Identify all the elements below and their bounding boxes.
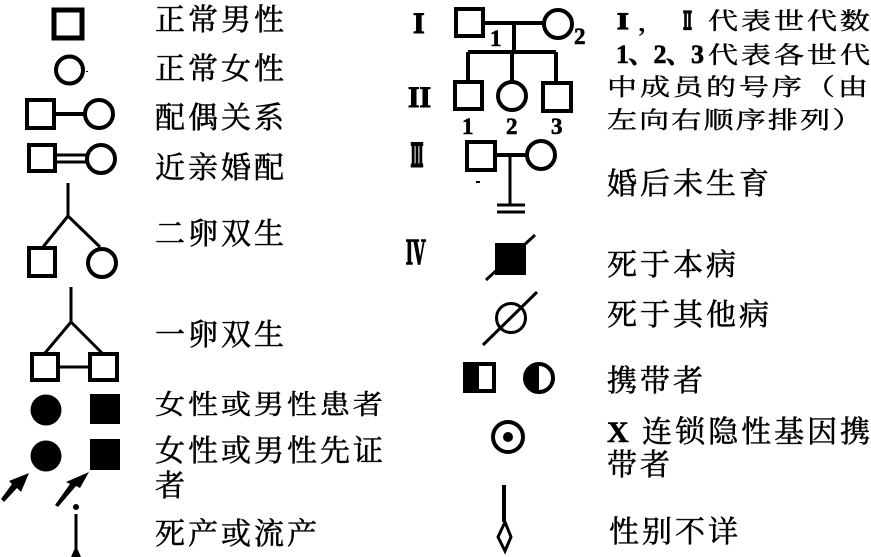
childless marriage symbol xyxy=(467,141,555,212)
label: normal female: 正常女性 xyxy=(155,53,287,86)
label: died of this disease: 死于本病 xyxy=(607,249,739,282)
pedigree example xyxy=(455,9,586,139)
label: stillbirth or miscarriage: 死产或流产 xyxy=(155,518,320,551)
pedigree description: I xyxy=(617,8,629,34)
sex unknown symbol xyxy=(498,485,511,551)
died of other disease symbol xyxy=(483,292,537,345)
label: carrier: 携带者 xyxy=(607,365,706,398)
label: childless after marriage: 婚后未生育 xyxy=(607,168,772,201)
proband symbols xyxy=(1,439,120,507)
label: proband line 2: 者 xyxy=(155,470,188,503)
label: consanguineous marriage: 近亲婚配 xyxy=(155,152,287,185)
normal male symbol xyxy=(54,10,82,38)
label: died of other disease: 死于其他病 xyxy=(607,299,772,332)
pedigree description: 1、2、3 xyxy=(616,40,704,69)
label: X-linked carrier: X 连锁隐性基因携 xyxy=(607,416,871,449)
generation I label: I xyxy=(413,7,425,40)
pedigree description: Ⅱ xyxy=(682,8,693,34)
pedigree description: 代表世代数 xyxy=(708,8,871,34)
X-linked carrier symbol xyxy=(493,422,523,452)
pedigree example: 1 xyxy=(462,114,474,139)
died of this disease symbol xyxy=(486,235,535,280)
pedigree example: 3 xyxy=(551,114,562,139)
affected female and male symbols xyxy=(30,394,120,426)
text: Ⅲ xyxy=(411,140,423,173)
label: affected: 女性或男性患者 xyxy=(155,390,386,421)
carrier symbols xyxy=(464,363,553,392)
label: X-linked carrier: 带者 xyxy=(607,449,673,482)
monozygotic twins symbol xyxy=(32,287,117,380)
pedigree example: 2 xyxy=(506,114,518,139)
pedigree example: 1 xyxy=(490,26,502,51)
pedigree description: 左向右顺序排列） xyxy=(607,107,865,133)
label: X-linked carrier xyxy=(607,416,871,482)
consanguineous marriage symbol xyxy=(29,145,115,173)
pedigree example: 2 xyxy=(574,24,586,49)
generation II label: II xyxy=(408,81,431,114)
stillbirth or miscarriage symbol xyxy=(71,504,81,557)
dizygotic twins symbol xyxy=(29,183,116,277)
label: proband: 女性或男性先证 xyxy=(155,435,386,468)
spouse symbol xyxy=(27,100,113,128)
label: normal male: 正常男性 xyxy=(155,4,287,37)
label: sex unknown: 性别不详 xyxy=(609,516,741,549)
pedigree description xyxy=(607,8,871,133)
normal female symbol xyxy=(56,56,88,84)
label: spouses: 配偶关系 xyxy=(155,102,287,135)
pedigree description: 代表各世代 xyxy=(708,42,871,68)
label: dizygotic twins: 二卵双生 xyxy=(155,218,287,251)
pedigree description: 中成员的号序（由 xyxy=(607,74,871,100)
label: monozygotic twins: 一卵双生 xyxy=(155,319,287,352)
generation IV label: Ⅳ xyxy=(406,235,426,271)
pedigree description: ， xyxy=(637,10,670,36)
